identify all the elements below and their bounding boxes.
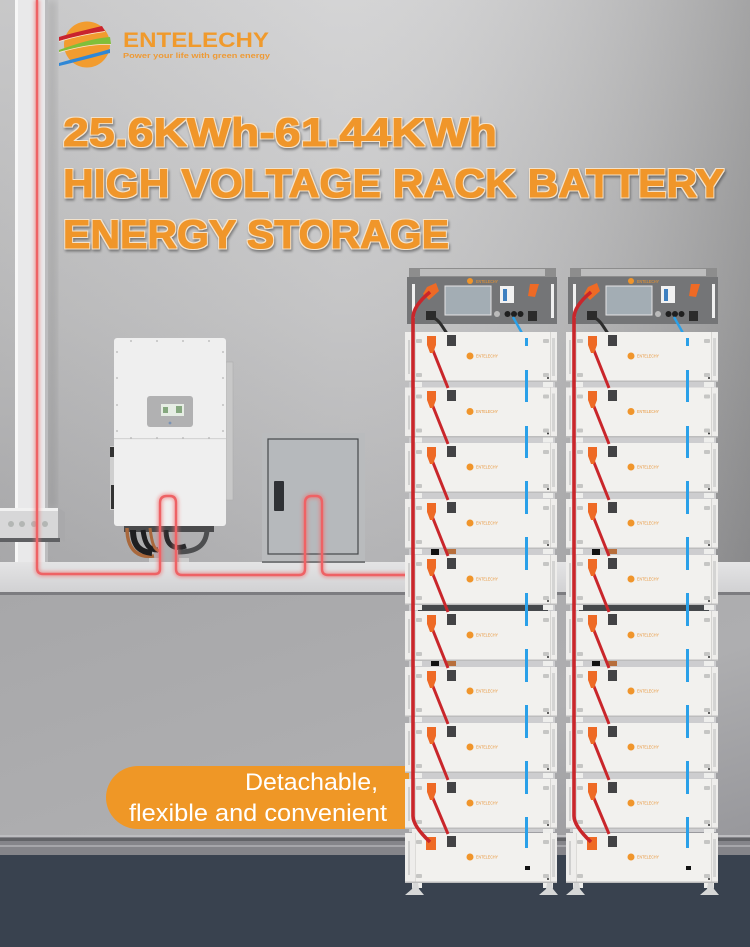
rack 1 module 5: ENTELECHY	[476, 576, 498, 582]
rack 1 module 6: ENTELECHY	[476, 632, 498, 638]
skirting board	[0, 835, 750, 855]
rack 1 module 4	[405, 499, 557, 554]
rack 1 module 2: ENTELECHY	[476, 409, 498, 414]
lower wall	[0, 594, 750, 835]
rack 2 module 8	[566, 723, 718, 778]
rack 1 red links	[432, 348, 448, 834]
logo icon: striped sun	[59, 22, 111, 68]
red glowing cable path	[37, 0, 410, 575]
rack 1 module 7: ENTELECHY	[476, 688, 498, 694]
rack 1 module 1	[405, 332, 557, 387]
rack 2 blue links	[686, 338, 689, 848]
rack 2 module 10: ENTELECHY	[637, 854, 659, 860]
rack 2 module 9: ENTELECHY	[637, 800, 659, 806]
rack 2 module 5	[566, 555, 718, 610]
callout pill: Detachable,	[245, 769, 378, 796]
rack 1 module 3: ENTELECHY	[476, 464, 498, 470]
rack 1 module 4: ENTELECHY	[476, 520, 498, 526]
rack 1 orange plugs	[426, 336, 436, 850]
title line 1: 25.6KWh-61.44KWh	[63, 111, 497, 155]
rack 2 module 3: ENTELECHY	[637, 464, 659, 470]
rack 1 module 2	[405, 388, 557, 442]
rack 2 red links	[593, 348, 609, 834]
rack 2 module 3	[566, 443, 718, 498]
rack 2 module 2	[566, 388, 718, 442]
rack 1 module 5	[405, 555, 557, 610]
logo	[59, 22, 271, 68]
rack 1 feet	[405, 866, 558, 895]
rack 1 module 1: ENTELECHY	[476, 354, 498, 358]
conduit junction box	[0, 508, 65, 542]
rack 1 main red cable	[413, 292, 430, 842]
rack 1 controller	[407, 268, 557, 342]
rack 2 black connectors	[608, 335, 617, 847]
title line 3: ENERGY STORAGE	[63, 213, 449, 257]
rack 2 module 7	[566, 667, 718, 722]
rack 1 black connectors	[447, 335, 456, 847]
shelf trunking	[0, 562, 750, 595]
rack 2 module 9	[566, 779, 718, 834]
rack 2 controller: ENTELECHY	[637, 279, 659, 284]
rack 1 module 9: ENTELECHY	[476, 800, 498, 806]
rack 2 feet	[566, 866, 719, 895]
rack 2 module 8: ENTELECHY	[637, 744, 659, 750]
rack 2 orange plugs	[587, 336, 597, 850]
rack 2 module 7: ENTELECHY	[637, 688, 659, 694]
rack 2 module 6: ENTELECHY	[637, 632, 659, 638]
rack 2 controller	[568, 268, 718, 342]
floor	[0, 855, 750, 947]
rack 1 module 6	[405, 611, 557, 666]
rack 2 module 4	[566, 499, 718, 554]
rack 2 module 1	[566, 332, 718, 387]
callout pill: flexible and convenient	[129, 800, 387, 827]
tagline: Power your life with green energy	[123, 51, 271, 60]
battery rack 2	[566, 268, 719, 895]
rack 2 module 10	[566, 833, 718, 888]
rack 1 module 8	[405, 723, 557, 778]
electrical panel box	[262, 433, 365, 563]
rack 2 main red cable	[574, 292, 591, 842]
rack 1 background strips	[409, 380, 555, 832]
rack 1 module 10: ENTELECHY	[476, 854, 498, 860]
battery rack 1	[405, 268, 558, 895]
rack 1 module 3	[405, 443, 557, 498]
rack 2 background strips	[570, 380, 716, 832]
rack 2 module 5: ENTELECHY	[637, 576, 659, 582]
rack 2 module 6	[566, 611, 718, 666]
inverter cables	[124, 526, 214, 562]
callout pill	[106, 766, 410, 829]
rack 2 module 2: ENTELECHY	[637, 409, 659, 414]
wall background	[0, 0, 750, 562]
rack 1 blue links	[525, 338, 528, 848]
rack 1 module 7	[405, 667, 557, 722]
title line 2: HIGH VOLTAGE RACK BATTERY	[63, 162, 724, 206]
title	[63, 111, 724, 257]
rack 1 controller: ENTELECHY	[476, 279, 498, 284]
rack 2 module 1: ENTELECHY	[637, 354, 659, 358]
brand name: ENTELECHY	[123, 28, 269, 52]
rack 2 module 4: ENTELECHY	[637, 520, 659, 526]
vertical conduit pipe	[15, 0, 48, 562]
rack 1 module 9	[405, 779, 557, 834]
rack 1 module 10	[405, 833, 557, 888]
inverter	[110, 338, 233, 562]
rack 1 module 8: ENTELECHY	[476, 744, 498, 750]
